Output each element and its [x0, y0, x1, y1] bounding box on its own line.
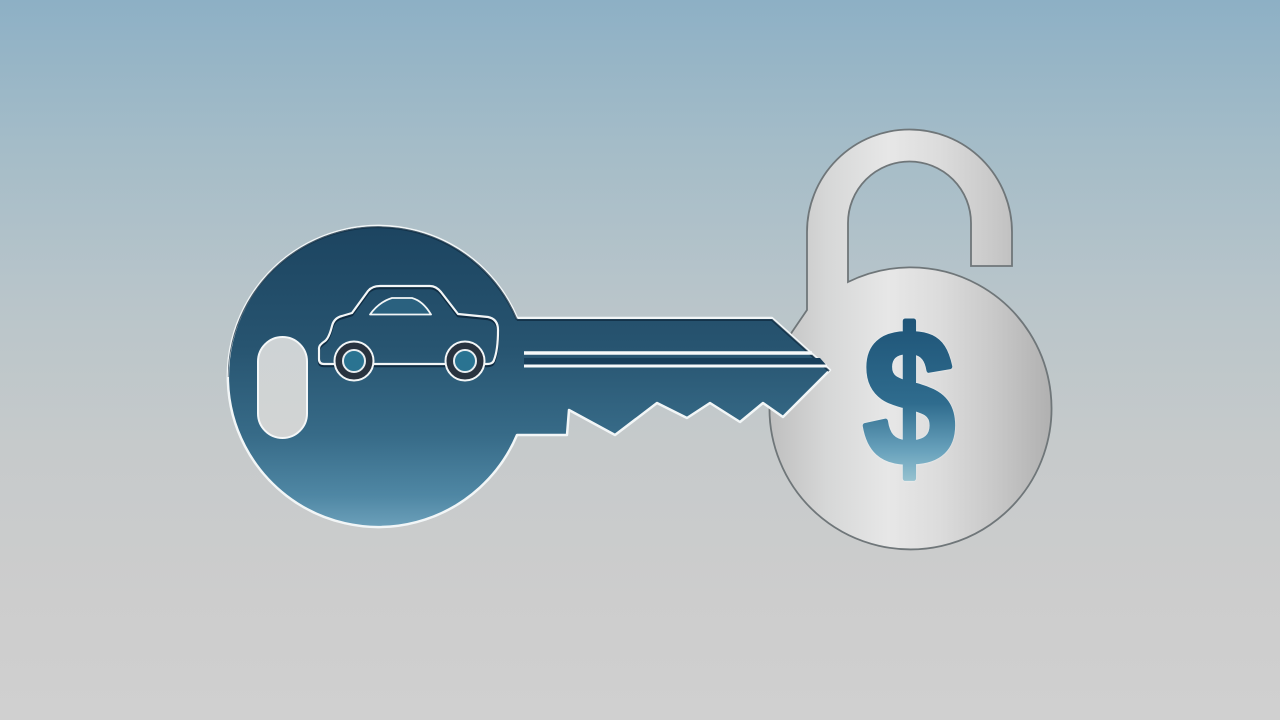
car window — [370, 298, 431, 314]
icon: car — [319, 286, 498, 380]
key — [228, 226, 830, 527]
padlock — [770, 130, 1052, 549]
padlock body and shackle — [770, 130, 1052, 549]
dollar sign cutout: $ — [863, 291, 955, 506]
key ring slot — [258, 337, 307, 438]
key groove — [524, 353, 827, 366]
rear wheel — [446, 342, 484, 380]
inner shadow on key edge — [228, 227, 830, 377]
front wheel — [334, 342, 374, 380]
car body outline — [319, 286, 498, 364]
key head and blade — [228, 226, 830, 527]
car body shadow — [319, 288, 498, 366]
